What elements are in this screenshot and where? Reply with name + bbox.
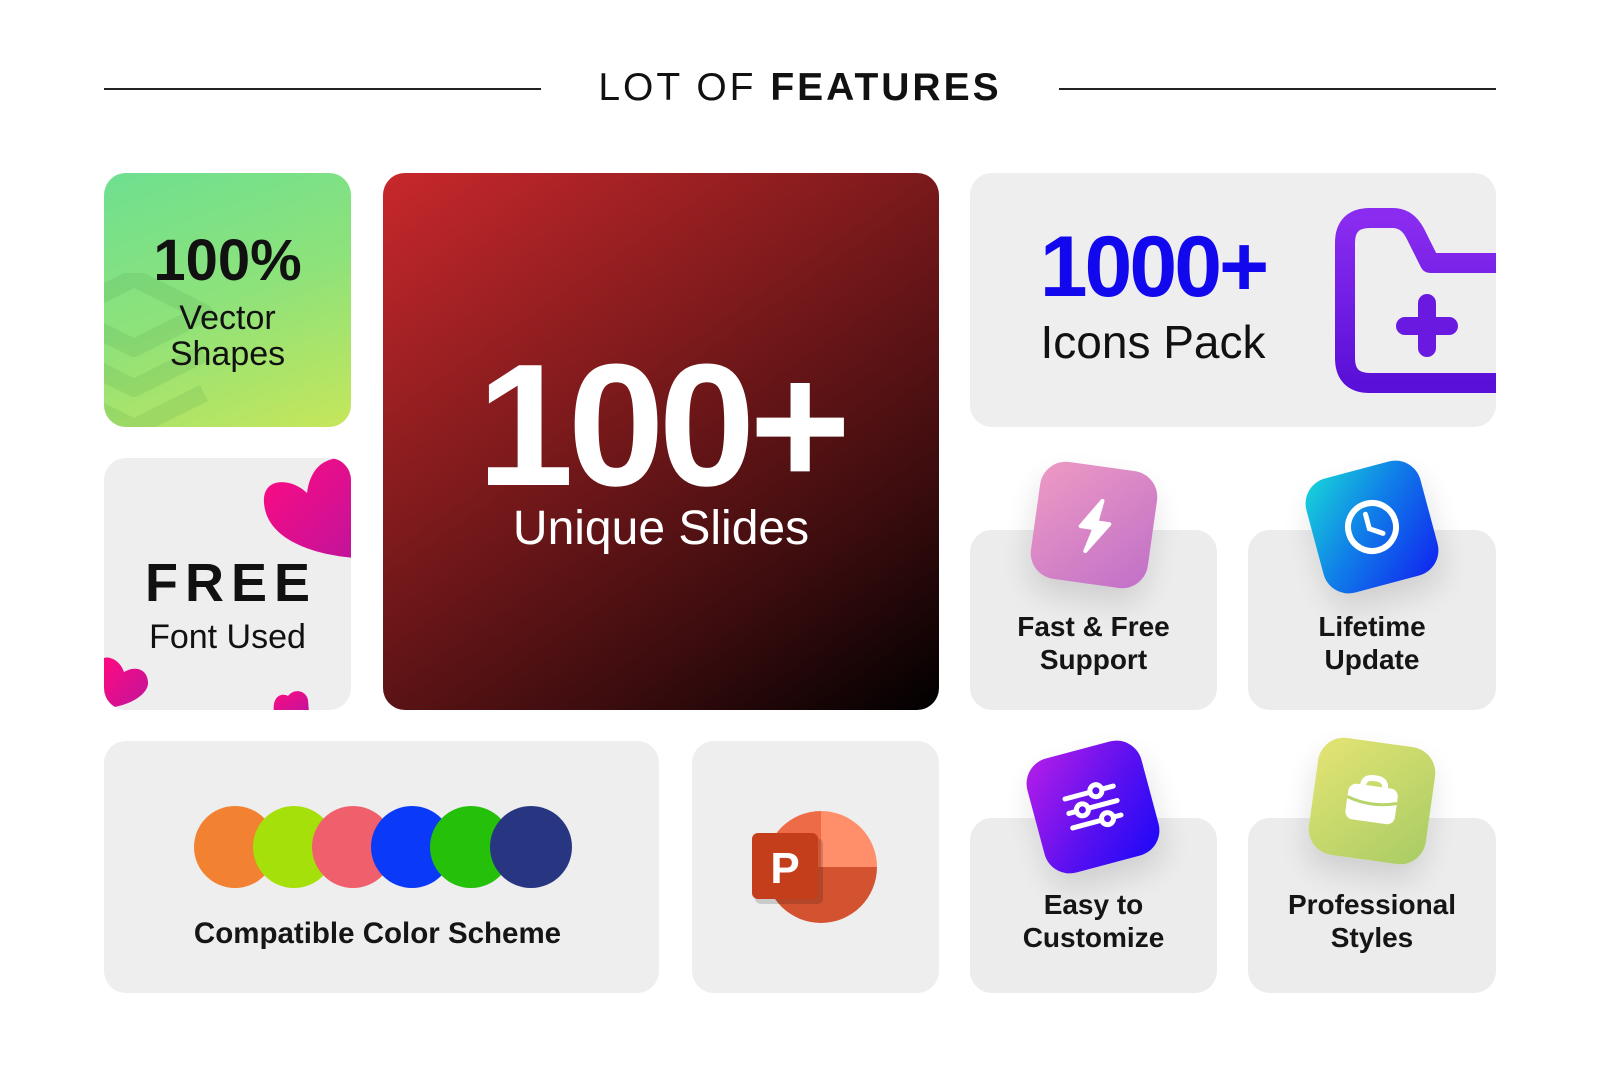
swatches xyxy=(194,806,572,888)
decorative chevrons xyxy=(104,273,212,427)
label xyxy=(1318,611,1426,675)
title rule right xyxy=(1059,88,1496,90)
label: Customize xyxy=(1023,922,1164,953)
text: font used: Font Used xyxy=(149,618,306,656)
icon: heart small left xyxy=(104,658,148,707)
panel: unique slides xyxy=(383,173,939,710)
text: vector shapes xyxy=(170,299,285,373)
text: 100%: 100% xyxy=(153,228,302,293)
label xyxy=(1017,611,1170,675)
label xyxy=(1288,889,1456,953)
icon: folder plus xyxy=(1335,208,1496,393)
label: Styles xyxy=(1331,922,1413,953)
panel: powerpoint xyxy=(692,741,939,993)
text: icons pack: Icons Pack xyxy=(1040,316,1266,368)
text: unique slides: Unique Slides xyxy=(513,502,809,555)
label: Fast & Free xyxy=(1017,611,1170,642)
panel: easy customize xyxy=(970,818,1217,993)
panel: vector shapes xyxy=(104,173,351,427)
label: Professional xyxy=(1288,889,1456,920)
panel: professional styles xyxy=(1248,818,1496,993)
icon: clock xyxy=(1300,455,1444,599)
text: vector shapes: Shapes xyxy=(170,335,285,373)
panel: free font xyxy=(104,458,351,710)
label: Easy to xyxy=(1044,889,1143,920)
title rule left xyxy=(104,88,541,90)
icon: powerpoint xyxy=(752,811,877,923)
icon: sliders xyxy=(1021,735,1165,879)
label: Support xyxy=(1040,644,1147,675)
text: FREE: FREE xyxy=(145,553,317,613)
label xyxy=(1023,889,1164,953)
title: LOT OF FEATURES xyxy=(598,66,1002,109)
panel: fast support xyxy=(970,530,1217,710)
icon: heart big xyxy=(264,458,351,558)
icon: heart small bottom xyxy=(274,691,309,710)
text: 1000+: 1000+ xyxy=(1040,219,1266,315)
text: 100+: 100+ xyxy=(477,327,845,522)
icon: powerpoint: P xyxy=(770,844,800,893)
icon: briefcase xyxy=(1305,734,1439,868)
icon: lightning xyxy=(1027,458,1161,592)
panel: lifetime update xyxy=(1248,530,1496,710)
text: vector shapes: Vector xyxy=(179,299,276,337)
label: Update xyxy=(1325,644,1419,675)
label: Lifetime xyxy=(1318,611,1426,642)
panel: color scheme xyxy=(104,741,659,993)
panel: icons pack xyxy=(970,173,1496,427)
label: Compatible Color Scheme xyxy=(194,917,561,950)
